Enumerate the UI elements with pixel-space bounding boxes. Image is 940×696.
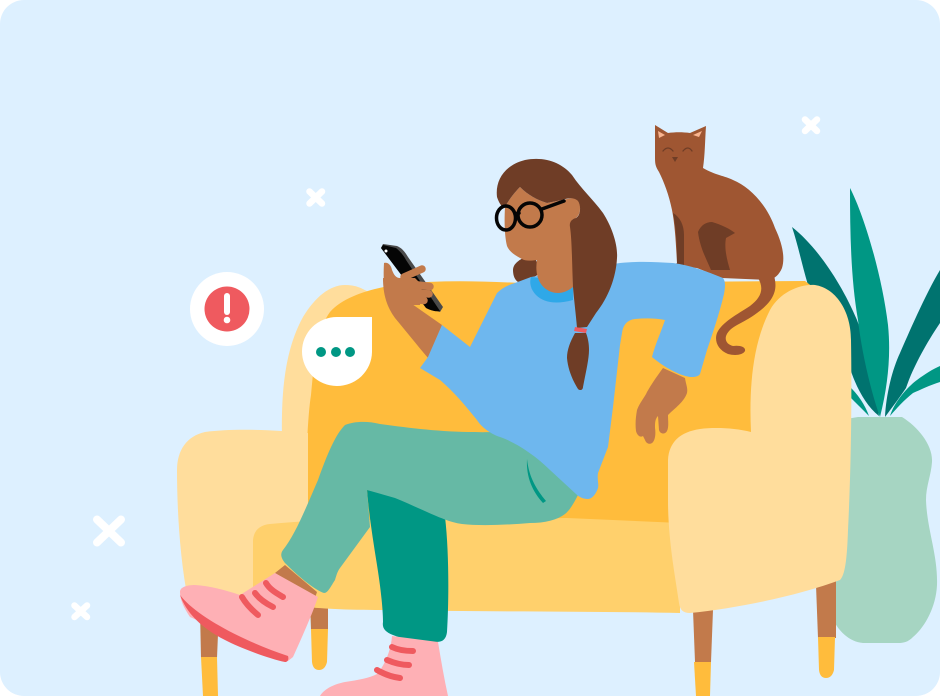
cat inner ears xyxy=(658,131,702,138)
shoe upper xyxy=(320,636,448,696)
sofa left armrest xyxy=(177,430,308,600)
right shoe xyxy=(320,636,448,696)
back hair tuft xyxy=(513,257,541,282)
sofa left back arm xyxy=(282,285,368,450)
sweater xyxy=(420,262,725,499)
hand and fingers xyxy=(384,263,430,305)
leaf: center light xyxy=(850,188,889,417)
left shoe xyxy=(180,565,318,662)
cat hind leg shade xyxy=(698,222,735,270)
hair xyxy=(497,159,617,328)
glasses xyxy=(496,201,564,230)
chat bubble icon xyxy=(302,317,372,386)
shoe laces xyxy=(242,583,283,615)
shoe sole xyxy=(180,595,288,662)
leaf: right dark xyxy=(885,270,940,417)
collar xyxy=(530,277,573,302)
left leg pants dark xyxy=(367,490,448,642)
leaf: right low light xyxy=(890,366,940,416)
pants pocket line xyxy=(527,459,546,503)
cat xyxy=(655,125,783,355)
left arm xyxy=(383,278,442,358)
shoe upper xyxy=(180,573,318,661)
right hand xyxy=(636,368,687,444)
leaf: small left xyxy=(848,385,869,416)
vase xyxy=(835,417,937,643)
plant xyxy=(792,188,940,417)
phone xyxy=(381,244,443,312)
braid xyxy=(567,333,589,390)
sofa xyxy=(177,281,851,696)
icon: sparkle crosses xyxy=(74,120,817,617)
ankle xyxy=(275,565,317,598)
right leg pants light xyxy=(281,422,578,593)
cat body xyxy=(655,125,783,280)
sofa seat xyxy=(253,518,680,613)
sofa back cushion xyxy=(306,281,830,540)
cat tail xyxy=(716,270,775,355)
hair band xyxy=(574,327,587,333)
alert icon xyxy=(190,272,264,346)
cat shaded legs xyxy=(673,213,684,265)
shoe laces xyxy=(377,647,413,678)
sofa legs xyxy=(200,580,836,696)
face and neck xyxy=(505,187,580,293)
sofa right armrest xyxy=(668,285,851,613)
cat face xyxy=(663,148,692,162)
leaf: left dark xyxy=(792,227,879,416)
